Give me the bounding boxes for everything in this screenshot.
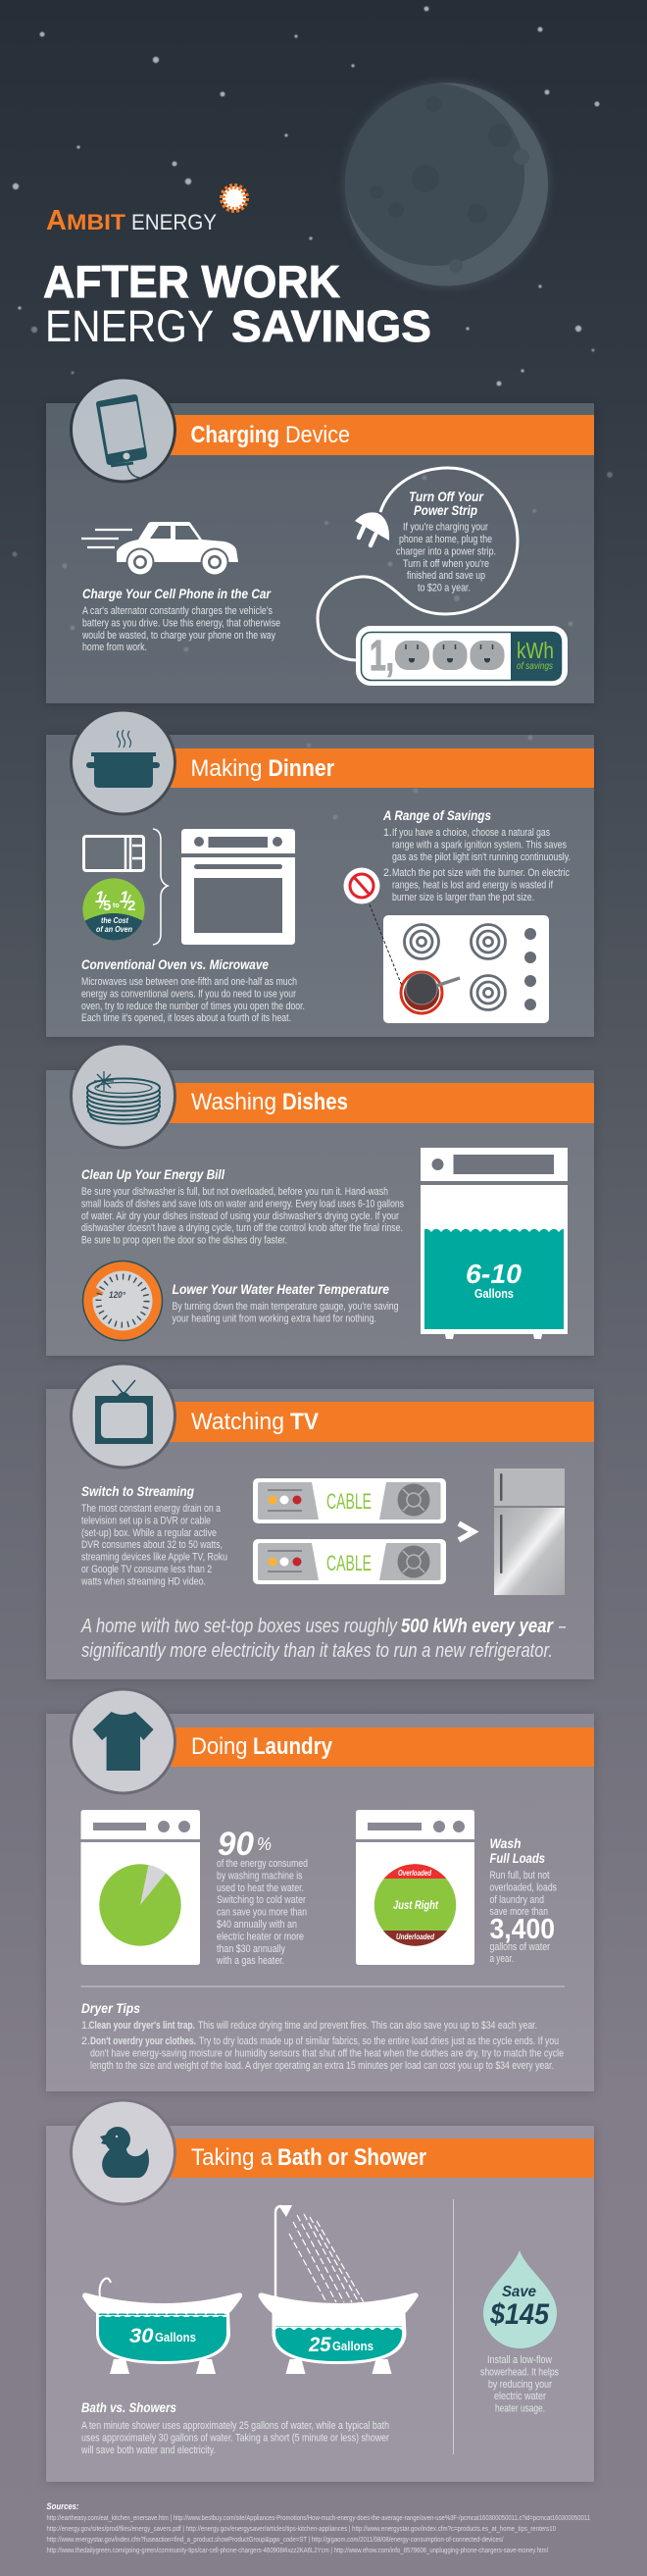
title: SAVINGS [231, 301, 431, 351]
text: a range of savings: 2. [383, 867, 392, 879]
logo: Ambit Energy: A [46, 205, 67, 236]
badge: one fifth to one half the cost of an oven [82, 878, 145, 944]
icon: tv [71, 1364, 174, 1468]
text: lower your water heater temperature: By turning down the main temperature gauge, you're saving [173, 1301, 399, 1313]
dashed pointer line [370, 904, 402, 986]
washer with load gauge: Overloaded [398, 1869, 432, 1878]
power strip: 1,000 kWh: 1, [370, 632, 394, 680]
icon: oven [181, 829, 295, 945]
text: lower your water heater temperature: Lower Your Water Heater Temperature [173, 1282, 389, 1297]
title: ENERGY [45, 301, 214, 351]
text: turn off power strip [396, 489, 496, 594]
washer with pie chart [80, 1810, 200, 1965]
icon: temperature gauge: 120° [109, 1290, 125, 1300]
icon: pot [71, 710, 174, 814]
sources: Sources: [47, 2501, 78, 2512]
text: dryer tips [81, 2001, 564, 2072]
badge: one fifth to one half the cost of an oven: / [98, 893, 107, 913]
section heading second word: Dinner [269, 755, 334, 782]
text: switch to streaming [80, 1484, 227, 1587]
text: 90 percent: of the energy consumed [217, 1858, 308, 1870]
text: dryer tips: Try to dry loads made up of similar fabrics, so the entire load dries just as the cycle ends. If you [199, 2035, 559, 2047]
text: turn off power strip: Turn it off when you're [403, 558, 489, 570]
icon: shower and bathtub 25 gallons [259, 2205, 419, 2374]
icon: temperature gauge [82, 1262, 163, 1340]
text: charge in the car: A car's alternator constantly charges the vehicle's [82, 605, 273, 617]
washer with load gauge: Just Right [393, 1898, 439, 1912]
icon: microwave [84, 835, 144, 871]
text: clean up your energy bill: Clean Up Your Energy Bill [81, 1167, 225, 1182]
text: 90 percent: % [257, 1834, 272, 1854]
text: clean up your energy bill: Be sure your dishwasher is full, but not overloaded, before you run it. Hand-wash [81, 1186, 388, 1198]
text: clean up your energy bill: dishwasher doesn't have a drying cycle, turn off the control knob after the final rinse. [81, 1222, 403, 1234]
cable box 1: CABLE [326, 1489, 372, 1514]
icon: car [81, 522, 238, 577]
text: switch to streaming: (set-up) box. While a regular active [81, 1527, 217, 1539]
text: a range of savings: ranges, heat is lost and energy is wasted if [392, 879, 553, 891]
text: wash full loads: gallons of water [490, 1941, 550, 1953]
section heading second word: Bath or Shower [277, 2144, 426, 2171]
icon: phone [71, 378, 174, 482]
text: low-flow showerhead: by reducing your [488, 2379, 552, 2391]
moon [342, 81, 549, 287]
stars [12, 6, 613, 557]
text: dryer tips: This will reduce drying time and prevent fires. This can also save you up to $34 each year. [198, 2020, 537, 2032]
text: clean up your energy bill [81, 1167, 404, 1247]
text: a range of savings [382, 808, 571, 903]
text: turn off power strip: charger into a power strip. [396, 545, 496, 557]
callout: 500 kWh: A home with two set-top boxes uses roughly [80, 1616, 398, 1637]
text: bath vs showers: will save both water and electricity. [80, 2445, 216, 2456]
text: wash full loads: a year. [490, 1953, 514, 1965]
text: a range of savings: gas as the pilot light isn't running continuously. [392, 851, 571, 863]
text: dryer tips: length to the size and weight of the load. A dryer operating an extra 15 minutes per load can cost you up to $34 every year. [90, 2060, 554, 2072]
text: low-flow showerhead: electric water [494, 2391, 546, 2402]
text: conventional oven vs microwave: oven, try to reduce the number of times you open the door. [81, 1001, 305, 1012]
text: dryer tips: Clean your dryer's lint trap. [88, 2020, 195, 2032]
panel: charging device [46, 378, 594, 703]
text: turn off power strip: Power Strip [414, 503, 477, 518]
text: charge in the car: battery as you drive. Use this energy, that otherwise [82, 617, 280, 629]
icon: stove top [383, 915, 549, 1023]
sources: http://energy.gov/sites/prod/files/energy_savers.pdf | http://energy.gov/energysaver/articles/tips-kitchen-appliances | http://www.energystar.gov/index.cfm?c=products.es_at_home_tips_renters10 [47, 2526, 556, 2533]
panel: washing dishes [46, 1044, 594, 1356]
text: turn off power strip: Turn Off Your [409, 489, 484, 504]
panel background [46, 403, 594, 703]
text: bath vs showers [80, 2400, 389, 2456]
badge: one fifth to one half the cost of an oven: the Cost [101, 915, 129, 925]
text: 90 percent: used to heat the water. [217, 1882, 304, 1894]
text: a range of savings: burner size is larger than the pot size. [392, 892, 534, 903]
text: wash full loads: Full Loads [490, 1851, 545, 1866]
text: wash full loads: save more than [490, 1906, 548, 1918]
section heading: Taking a [191, 2144, 274, 2171]
icon: dishwasher [421, 1148, 568, 1339]
callout: 500 kWh: – [558, 1616, 567, 1637]
text: 90 percent: than $30 annually [217, 1943, 286, 1955]
callout: 500 kWh: significantly more electricity than it takes to run a new refrigerator. [81, 1640, 553, 1662]
power cord and plug [318, 468, 518, 660]
logo: Ambit Energy [46, 186, 246, 236]
text: 90 percent: 90 [218, 1826, 254, 1863]
text: low-flow showerhead [480, 2354, 559, 2415]
text: 90 percent: can save you more than [217, 1907, 307, 1919]
sources: http://www.energystar.gov/index.cfm?fuseaction=find_a_product.showProductGroup&pgw_code=ST | http://gigaom.com/2011/08/08/energy-consumption-of-connected-devices/ [47, 2537, 504, 2544]
section heading: Washing [191, 1089, 276, 1115]
text: a range of savings: 1. [383, 827, 392, 839]
text: clean up your energy bill: Be sure to prop open the door so the dishes dry faster. [81, 1235, 287, 1247]
text: low-flow showerhead: heater usage. [495, 2403, 545, 2415]
text: wash full loads [490, 1836, 557, 1965]
panel background [46, 2126, 594, 2482]
title: AFTER WORK [43, 256, 340, 307]
text: 90 percent: by washing machine is [217, 1870, 302, 1881]
orange banner [167, 1727, 594, 1767]
callout: 500 kWh [80, 1616, 567, 1662]
text: clean up your energy bill: small loads of dishes and save lots on water and energy. Every load uses 6-10 gallons [81, 1198, 404, 1210]
text: conventional oven vs microwave [81, 957, 305, 1024]
icon: water drop save $145: $145 [489, 2298, 550, 2331]
badge: one fifth to one half the cost of an oven: 5 [103, 898, 111, 914]
text: wash full loads: of laundry and [490, 1894, 544, 1906]
cable box 1 [253, 1478, 446, 1523]
icon: plates [71, 1044, 174, 1148]
icon: bathtub 30 gallons: 30 [129, 2325, 154, 2347]
title [43, 256, 431, 351]
washer with load gauge [356, 1810, 474, 1965]
icon: bathtub 30 gallons [82, 2278, 242, 2374]
badge: one fifth to one half the cost of an oven: of an Oven [96, 924, 132, 934]
orange banner [167, 2138, 594, 2178]
logo: Ambit Energy: ENERGY [131, 210, 217, 234]
text: switch to streaming: The most constant energy drain on a [81, 1503, 221, 1515]
badge: one fifth to one half the cost of an oven: / [123, 893, 131, 913]
text: lower your water heater temperature [173, 1282, 399, 1324]
text: turn off power strip: If you're charging your [403, 522, 488, 534]
text: 90 percent: electric heater or more [217, 1931, 304, 1942]
section heading: Making [190, 755, 263, 782]
panel: watching tv [46, 1364, 594, 1679]
text: dryer tips: Don't overdry your clothes. [90, 2035, 196, 2047]
sources [47, 2501, 590, 2554]
text: a range of savings: Match the pot size with the burner. On electric [392, 867, 571, 879]
sources: http://www.thedailygreen.com/going-green/community-tips/car-cell-phone-chargers-460908#ixzz2KA6L2Ycm | http://www.ehow.com/info_8579608_unplugging-phone-chargers-save-money.html [47, 2548, 548, 2554]
text: switch to streaming: or Google TV consume less than 2 [81, 1564, 212, 1575]
text: bath vs showers: Bath vs. Showers [81, 2400, 176, 2415]
text: a range of savings: A Range of Savings [382, 808, 491, 823]
panel: taking a bath or shower [46, 2100, 594, 2482]
icon: shower and bathtub 25 gallons: 25 [308, 2334, 331, 2356]
text: turn off power strip: finished and save up [407, 570, 485, 582]
text: switch to streaming: Switch to Streaming [81, 1484, 195, 1499]
text: wash full loads: Run full, but not [490, 1870, 550, 1881]
text: charge in the car [81, 587, 280, 653]
text: conventional oven vs microwave: Microwaves use between one-fifth and one-half as much [81, 976, 297, 988]
text: wash full loads: Wash [490, 1836, 522, 1851]
power strip: 1,000 kWh: of savings [517, 661, 553, 672]
faint stars on panel [63, 475, 572, 651]
badge: one fifth to one half the cost of an oven: 2 [127, 898, 135, 914]
text: a range of savings: range with a spark ignition system. This saves [392, 840, 567, 851]
text: charge in the car: would be wasted, to charge your phone on the way [81, 630, 276, 642]
text: conventional oven vs microwave: energy as conventional ovens. If you do need to use your [81, 988, 296, 1000]
panel background [46, 1070, 594, 1356]
text: bath vs showers: A ten minute shower uses approximately 25 gallons of water, while a typical bath [81, 2420, 389, 2432]
greater than symbol [459, 1523, 473, 1540]
text: dryer tips: 2. [81, 2035, 90, 2047]
text: a range of savings: If you have a choice, choose a natural gas [392, 827, 550, 839]
section heading: Charging [190, 422, 279, 448]
icon: rubber duck [71, 2100, 174, 2204]
icon: shower and bathtub 25 gallons: Gallons [332, 2339, 373, 2353]
text: low-flow showerhead: Install a low-flow [487, 2354, 552, 2366]
text: wash full loads: 3,400 [490, 1914, 555, 1945]
washer with load gauge: Underloaded [396, 1932, 435, 1941]
text: 90 percent: Switching to cold water [217, 1894, 306, 1906]
badge: one fifth to one half the cost of an oven: 1 [95, 888, 104, 906]
text: switch to streaming: DVR consumes about 32 to 50 watts, [81, 1539, 223, 1551]
text: wash full loads: overloaded, loads [490, 1881, 557, 1893]
text: charge in the car: Charge Your Cell Phone in the Car [82, 587, 272, 601]
power strip: 1,000 kWh: kWh [517, 638, 554, 663]
logo: Ambit Energy: MBIT [67, 210, 126, 234]
text: dryer tips: Dryer Tips [81, 2001, 140, 2016]
orange banner [167, 1083, 594, 1123]
icon: water drop save $145 [483, 2250, 557, 2348]
panel background [46, 1389, 594, 1679]
text: dryer tips: 1. [81, 2020, 90, 2032]
faint stars on panel [307, 736, 533, 820]
brace [153, 829, 168, 945]
cable box 2: CABLE [326, 1551, 372, 1575]
text: switch to streaming: streaming devices like Apple TV, Roku [81, 1552, 227, 1564]
panel: making dinner [46, 710, 594, 1037]
callout: 500 kWh: 500 kWh every year [401, 1616, 554, 1637]
text: dryer tips: don't have energy-saving moisture or humidity sensors that shut off the heat when the clothes are dry, try to match the cycle [90, 2048, 564, 2060]
icon: dishwasher: Gallons [474, 1286, 514, 1301]
icon: t-shirt [71, 1689, 174, 1793]
section heading second word: Laundry [253, 1733, 333, 1760]
text: conventional oven vs microwave: Each time it's opened, it loses about a fourth of its heat. [81, 1012, 291, 1024]
section heading: Watching [191, 1409, 284, 1435]
section heading second word: Device [285, 422, 350, 448]
icon: no sign [343, 867, 380, 904]
section heading second word: TV [290, 1409, 319, 1435]
orange banner [167, 1402, 594, 1442]
text: 90 percent [216, 1826, 308, 1967]
icon: water drop save $145: Save [502, 2284, 536, 2300]
panel: doing laundry [46, 1689, 594, 2091]
section heading: Doing [191, 1733, 247, 1760]
orange banner [167, 415, 594, 455]
text: turn off power strip: to $20 a year. [418, 583, 471, 594]
badge: one fifth to one half the cost of an oven: to [113, 902, 120, 909]
text: clean up your energy bill: of water. Air dry your dishes instead of using your dishwasher's drying cycle. If your [81, 1211, 399, 1222]
text: bath vs showers: uses approximately 30 gallons of water. Taking a short (5 minute or less) shower [81, 2432, 389, 2444]
text: switch to streaming: watts when streaming HD video. [80, 1575, 206, 1587]
icon: bathtub 30 gallons: Gallons [155, 2330, 196, 2344]
text: turn off power strip: phone at home, plug the [399, 534, 492, 545]
text: conventional oven vs microwave: Conventional Oven vs. Microwave [81, 957, 269, 972]
text: low-flow showerhead: showerhead. It helps [480, 2366, 559, 2378]
cable box 2 [253, 1539, 446, 1584]
text: 90 percent: $40 annually with an [217, 1919, 297, 1931]
text: 90 percent: with a gas heater. [216, 1955, 284, 1967]
badge: one fifth to one half the cost of an oven: 1 [120, 888, 128, 906]
panel background [46, 735, 594, 1037]
orange banner [167, 748, 594, 788]
icon: refrigerator [494, 1468, 565, 1595]
icon: dishwasher: 6-10 [466, 1259, 522, 1289]
power strip: 1,000 kWh [356, 626, 568, 686]
panel background [46, 1714, 594, 2091]
text: lower your water heater temperature: your heating unit from working extra hard for nothing. [173, 1313, 376, 1324]
section heading second word: Dishes [282, 1089, 348, 1115]
text: switch to streaming: television set up is a DVR or cable [81, 1515, 211, 1526]
text: charge in the car: home from work. [82, 642, 147, 653]
